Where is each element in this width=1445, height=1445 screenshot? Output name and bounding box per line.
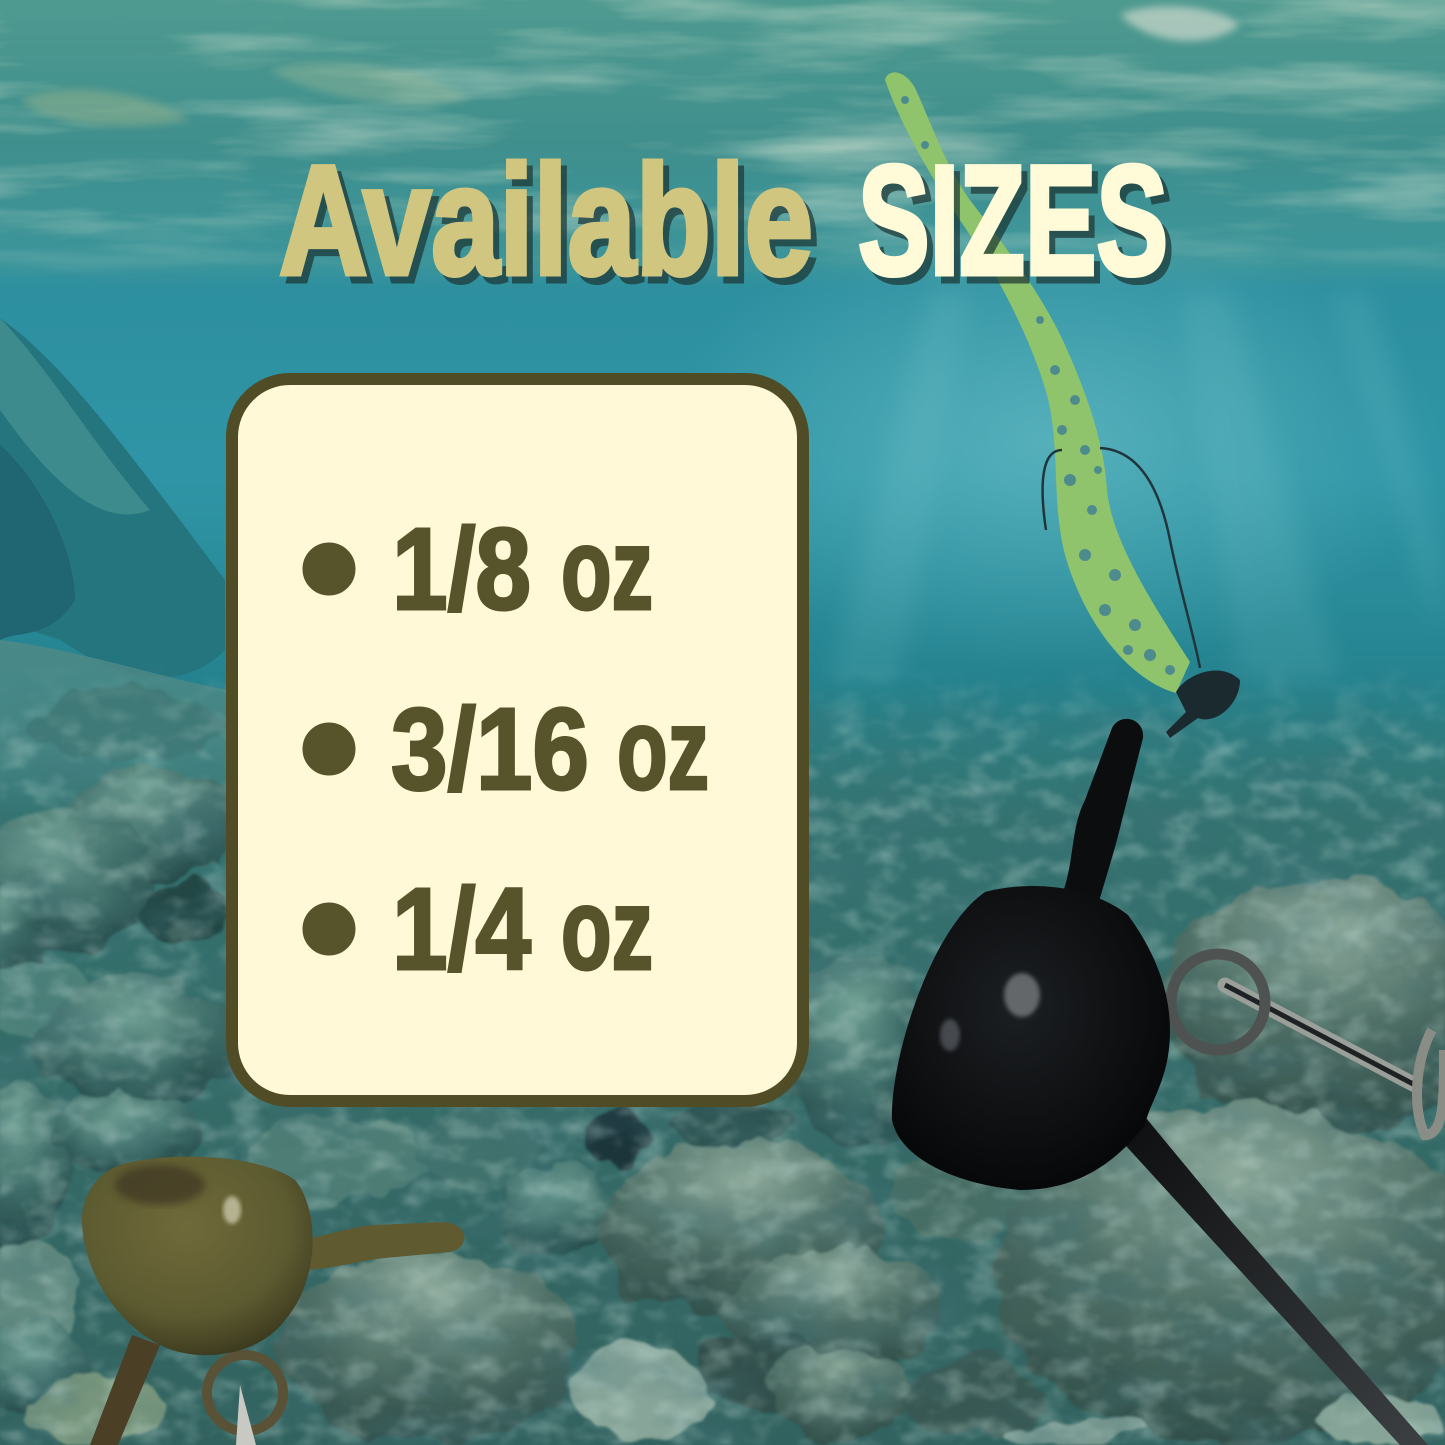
distant riverbed bbox=[0, 680, 1445, 1445]
left cliff rocks bbox=[0, 318, 228, 820]
title: SIZES bbox=[864, 141, 1174, 315]
size: 1/8 oz: oz bbox=[561, 504, 653, 634]
size: 1/8 oz bbox=[304, 504, 653, 634]
size: 3/16 oz: oz bbox=[617, 684, 709, 814]
eye ring bbox=[207, 1355, 283, 1431]
size: 1/8 oz: 1/8 bbox=[392, 504, 531, 634]
line tie bbox=[300, 1222, 464, 1270]
title: Available bbox=[279, 134, 813, 308]
riverbed caustics bbox=[0, 660, 1445, 1445]
rocks bbox=[0, 650, 1445, 1445]
title: SIZES bbox=[858, 134, 1168, 308]
icon: green worm lure with jig head bbox=[885, 72, 1240, 738]
size: 1/4 oz bbox=[304, 864, 653, 994]
eye ring bbox=[1171, 954, 1265, 1050]
water surface streaks bbox=[0, 0, 1445, 285]
title: Available bbox=[285, 141, 819, 315]
line tie bbox=[1062, 719, 1143, 905]
hook shank bbox=[90, 1335, 160, 1445]
size: 3/16 oz: 3/16 bbox=[391, 684, 589, 814]
icon: olive jig head bbox=[82, 1157, 464, 1445]
panel: size list bbox=[232, 379, 803, 1101]
size: 1/4 oz: oz bbox=[561, 864, 653, 994]
weight bbox=[82, 1157, 313, 1355]
icon: black jig head bbox=[892, 719, 1444, 1445]
size: 1/4 oz: 1/4 bbox=[392, 864, 531, 994]
wire keeper bbox=[1225, 985, 1415, 1085]
size: 3/16 oz bbox=[304, 684, 709, 814]
hook shank bbox=[1116, 1118, 1428, 1445]
weight bbox=[892, 886, 1170, 1190]
